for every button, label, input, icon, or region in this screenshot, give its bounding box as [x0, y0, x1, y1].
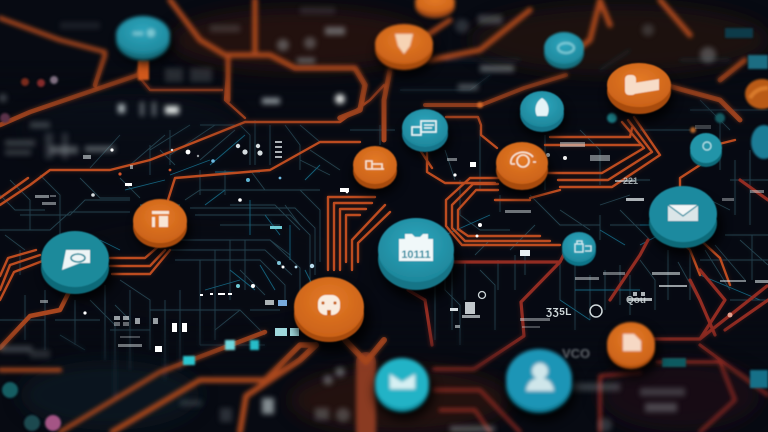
icon: cart	[366, 161, 384, 169]
node: orange pin upper centre	[375, 24, 433, 70]
printed board markings	[546, 176, 646, 361]
node: blue small lock	[562, 232, 596, 266]
icon: server	[412, 121, 436, 135]
in focus circuit traces	[0, 70, 768, 367]
node: orange top edge	[415, 0, 455, 18]
icon: shield	[395, 34, 413, 54]
node: blue top left	[116, 16, 170, 60]
icon: robot face	[318, 295, 340, 315]
icon: envelope	[668, 205, 698, 221]
node: blue upper right	[544, 32, 584, 69]
icon: ring	[703, 142, 711, 150]
icon: drop	[535, 98, 549, 116]
node: blue monitor	[402, 109, 448, 152]
node: orange headset	[496, 142, 548, 190]
icon: chat card	[62, 250, 90, 270]
printed board markings: ƷƷ5L	[546, 307, 572, 318]
icon: building	[152, 211, 169, 227]
node: blue envelope lower	[375, 358, 429, 412]
icon: envelope	[390, 374, 415, 389]
node: orange lower right	[607, 322, 655, 369]
icon: faint glyph	[133, 29, 155, 37]
node: orange right edge	[745, 79, 768, 109]
node: blue right edge	[751, 125, 768, 159]
icon: calendar label: 10111	[401, 249, 431, 261]
printed board markings: VCO	[562, 346, 590, 361]
icon: tag	[625, 75, 659, 95]
icon: headset	[511, 152, 536, 167]
icon: document	[623, 334, 641, 351]
icon: user	[526, 363, 554, 391]
components and solder points: in focus	[35, 125, 768, 352]
node: blue large left	[41, 231, 109, 294]
node: orange large lower	[294, 277, 364, 342]
node: orange left	[133, 199, 187, 248]
printed board markings: 221	[623, 176, 638, 186]
node: orange centre	[353, 146, 397, 189]
node: blue user	[506, 349, 572, 413]
node: blue envelope	[649, 186, 717, 248]
icon: lock	[575, 241, 591, 252]
node: blue small right	[690, 133, 722, 167]
printed board markings: Qou	[626, 295, 646, 306]
node: orange large upper right	[607, 63, 671, 114]
node: blue pin	[520, 91, 564, 132]
icon: faint chat	[558, 43, 574, 53]
node: blue large centre	[378, 218, 454, 290]
